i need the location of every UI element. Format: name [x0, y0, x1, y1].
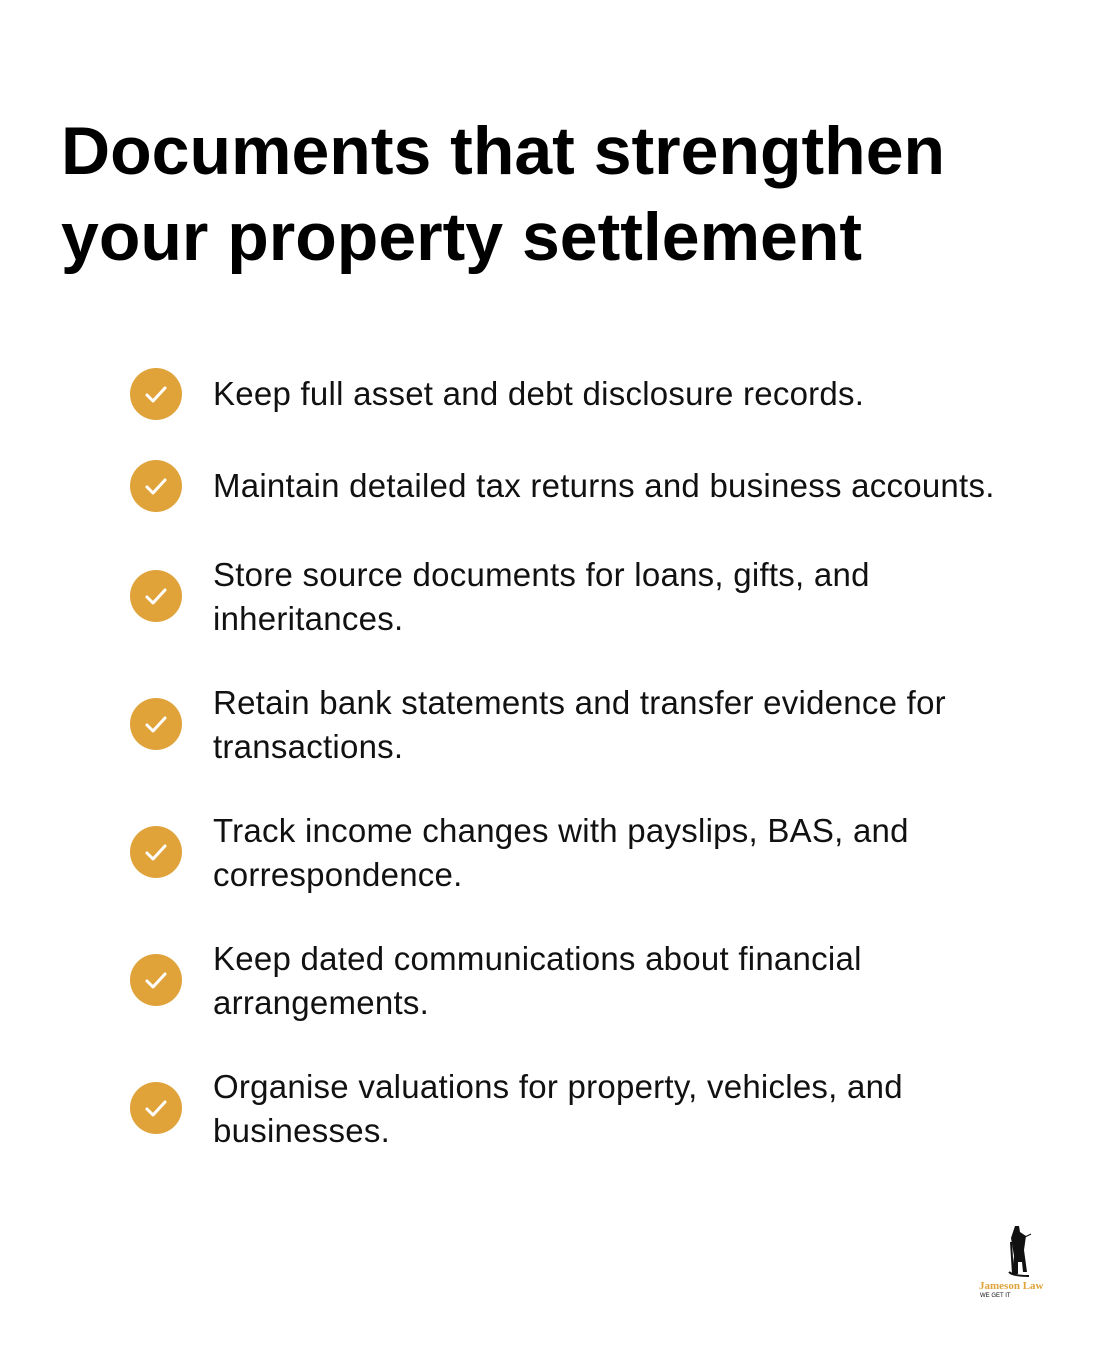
logo: WE GET IT [980, 1293, 1011, 1299]
text: transactions. [213, 728, 403, 765]
text: correspondence. [213, 856, 463, 893]
text: inheritances. [213, 600, 403, 637]
text [213, 684, 946, 765]
text: Keep dated communications about financial [213, 940, 862, 977]
item 4 [130, 684, 946, 765]
item 2 [130, 460, 995, 512]
icon: check [130, 1082, 182, 1134]
item 3 [130, 556, 870, 637]
item 7 [130, 1068, 903, 1149]
item 5 [130, 812, 909, 893]
text: Track income changes with payslips, BAS, and [213, 812, 909, 849]
text [213, 940, 862, 1021]
logo: Jameson Law [979, 1280, 1044, 1292]
text: Retain bank statements and transfer evidence for [213, 684, 946, 721]
icon: check [130, 570, 182, 622]
icon: check [130, 368, 182, 420]
title [61, 113, 945, 275]
icon: check [130, 954, 182, 1006]
text: Keep full asset and debt disclosure records. [213, 375, 864, 412]
text: Store source documents for loans, gifts, and [213, 556, 870, 593]
item 1 [130, 368, 864, 420]
icon: check [130, 460, 182, 512]
text [213, 812, 909, 893]
text: businesses. [213, 1112, 390, 1149]
text [213, 556, 870, 637]
text: arrangements. [213, 984, 429, 1021]
item 6 [130, 940, 862, 1021]
icon: check [130, 826, 182, 878]
title: Documents that strengthen [61, 113, 945, 189]
icon: check [130, 698, 182, 750]
text: Maintain detailed tax returns and business accounts. [213, 467, 995, 504]
text: Organise valuations for property, vehicles, and [213, 1068, 903, 1105]
logo [979, 1226, 1044, 1299]
title: your property settlement [61, 199, 862, 275]
text [213, 1068, 903, 1149]
